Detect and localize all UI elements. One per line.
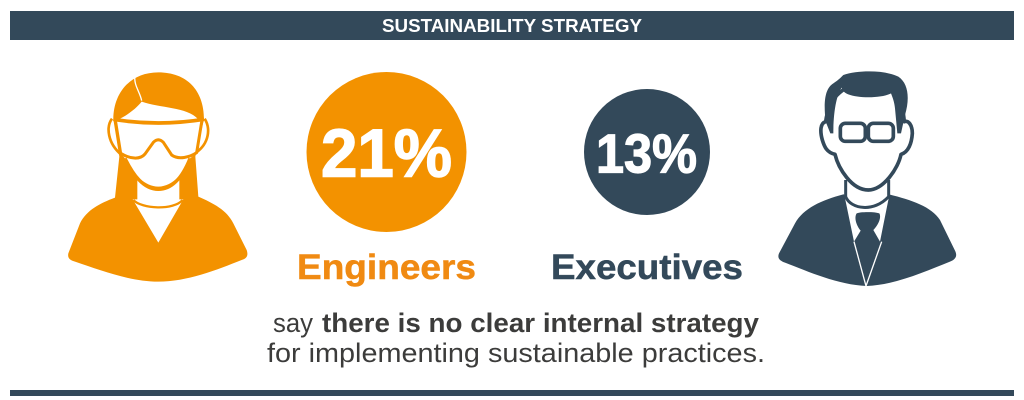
label: executives: Executives <box>551 248 743 287</box>
chart: engineers 21 percent circle <box>306 72 466 232</box>
chart: engineers 21 percent circle: 21% <box>321 116 452 192</box>
header bar: SUSTAINABILITY STRATEGY <box>382 16 642 36</box>
footer bar <box>10 390 1014 396</box>
icon: male executive with glasses <box>778 71 956 286</box>
body text: say <box>273 308 313 338</box>
body text <box>267 308 765 368</box>
label: engineers: Engineers <box>297 248 476 287</box>
body text: for implementing sustainable practices. <box>267 338 765 368</box>
chart: executives 13 percent circle: 13% <box>596 122 697 184</box>
body text: there is no clear internal strategy <box>322 308 759 338</box>
chart: executives 13 percent circle <box>584 89 710 215</box>
icon: female engineer with goggles <box>68 72 247 282</box>
header bar <box>10 11 1014 40</box>
